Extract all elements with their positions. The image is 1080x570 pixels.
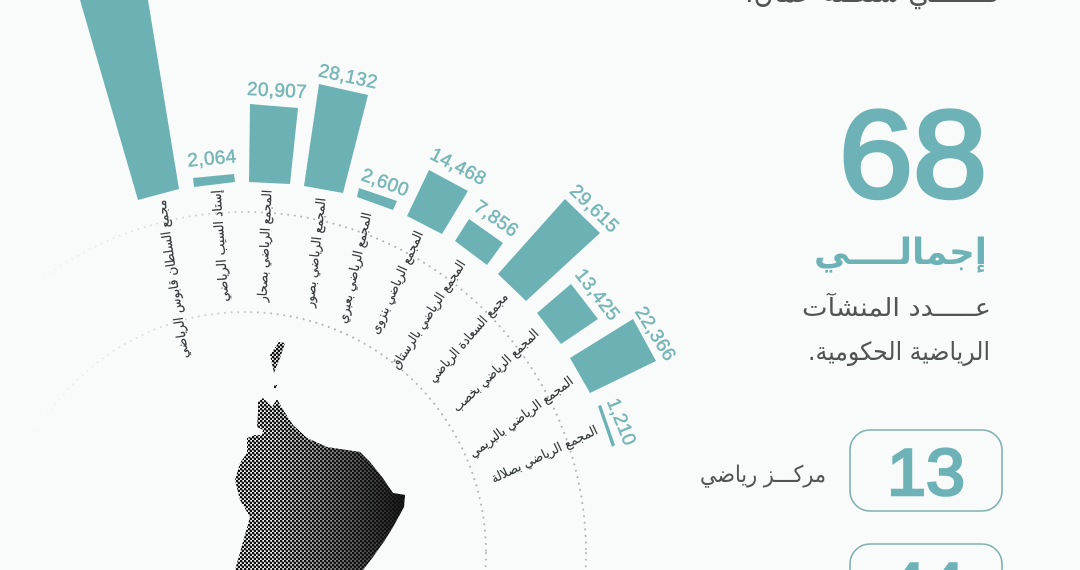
bar: Nizwa complex xyxy=(368,144,489,336)
map of Oman, halftone xyxy=(230,335,410,570)
description text xyxy=(802,292,991,366)
bar: Buraimi complex xyxy=(466,303,680,461)
bar: Sultan Qaboos complex: مجمع السلطان قابوس الرياضي xyxy=(155,199,193,359)
dotted radial rings xyxy=(0,212,586,570)
bar: Saada complex xyxy=(425,181,623,386)
bar: Ibri complex: المجمع الرياضي بعبري xyxy=(336,211,375,325)
big total number: 68 xyxy=(839,86,987,224)
bar: Seeb stadium xyxy=(187,146,237,302)
bar: Seeb stadium: 2,064 xyxy=(187,146,237,172)
bar: Sur complex: المجمع الرياضي بصور xyxy=(302,197,329,309)
total heading: إجمالــــي xyxy=(814,232,987,273)
bar: Saada complex: مجمع السعادة الرياضي xyxy=(425,290,512,386)
bar: Sohar complex: 20,907 xyxy=(247,79,307,103)
radial bar chart: sports complexes xyxy=(80,0,680,487)
bar: Khasab complex: 13,425 xyxy=(570,265,624,325)
bar: Rustaq complex: 7,856 xyxy=(470,196,522,242)
stat: second box, cropped xyxy=(850,544,1002,570)
bar: Salalah complex: 1,210 xyxy=(602,395,640,449)
bar: Ibri complex: 2,600 xyxy=(358,165,412,201)
description text: عـــــدد المنشآت xyxy=(802,292,991,322)
bar: Rustaq complex: المجمع الرياضي بالرستاق xyxy=(389,258,469,372)
bar: Salalah complex: المجمع الرياضي بصلالة xyxy=(489,423,600,487)
bar: Sohar complex xyxy=(247,79,307,303)
description text: الرياضية الحكومية. xyxy=(808,337,990,366)
bar: Ibri complex xyxy=(336,165,412,325)
bar: Sohar complex: المجمع الرياضي بصحار xyxy=(255,190,275,303)
bar: Khasab complex: المجمع الرياضي بخصب xyxy=(450,327,542,415)
bar: Seeb stadium: إستاد السيب الرياضي xyxy=(210,189,232,302)
stat: sports centres: 13 xyxy=(887,435,965,509)
bar: Salalah complex xyxy=(489,395,640,487)
bar: Saada complex: 29,615 xyxy=(565,181,623,237)
bar: Sultan Qaboos complex xyxy=(80,0,193,359)
stat: sports centres xyxy=(700,430,1002,511)
bar: Sur complex xyxy=(302,61,379,309)
bar: Buraimi complex: 22,366 xyxy=(630,303,680,365)
bar: Sur complex: 28,132 xyxy=(317,61,379,93)
bar: Buraimi complex: المجمع الرياضي بالبريمي xyxy=(466,374,576,461)
stat: sports centres: مركـــز رياضي xyxy=(700,462,826,488)
bar: Khasab complex xyxy=(450,265,624,415)
bar: Rustaq complex xyxy=(389,196,522,372)
bar: Nizwa complex: 14,468 xyxy=(427,144,489,190)
bar: Nizwa complex: المجمع الرياضي بنزوى xyxy=(368,229,427,336)
